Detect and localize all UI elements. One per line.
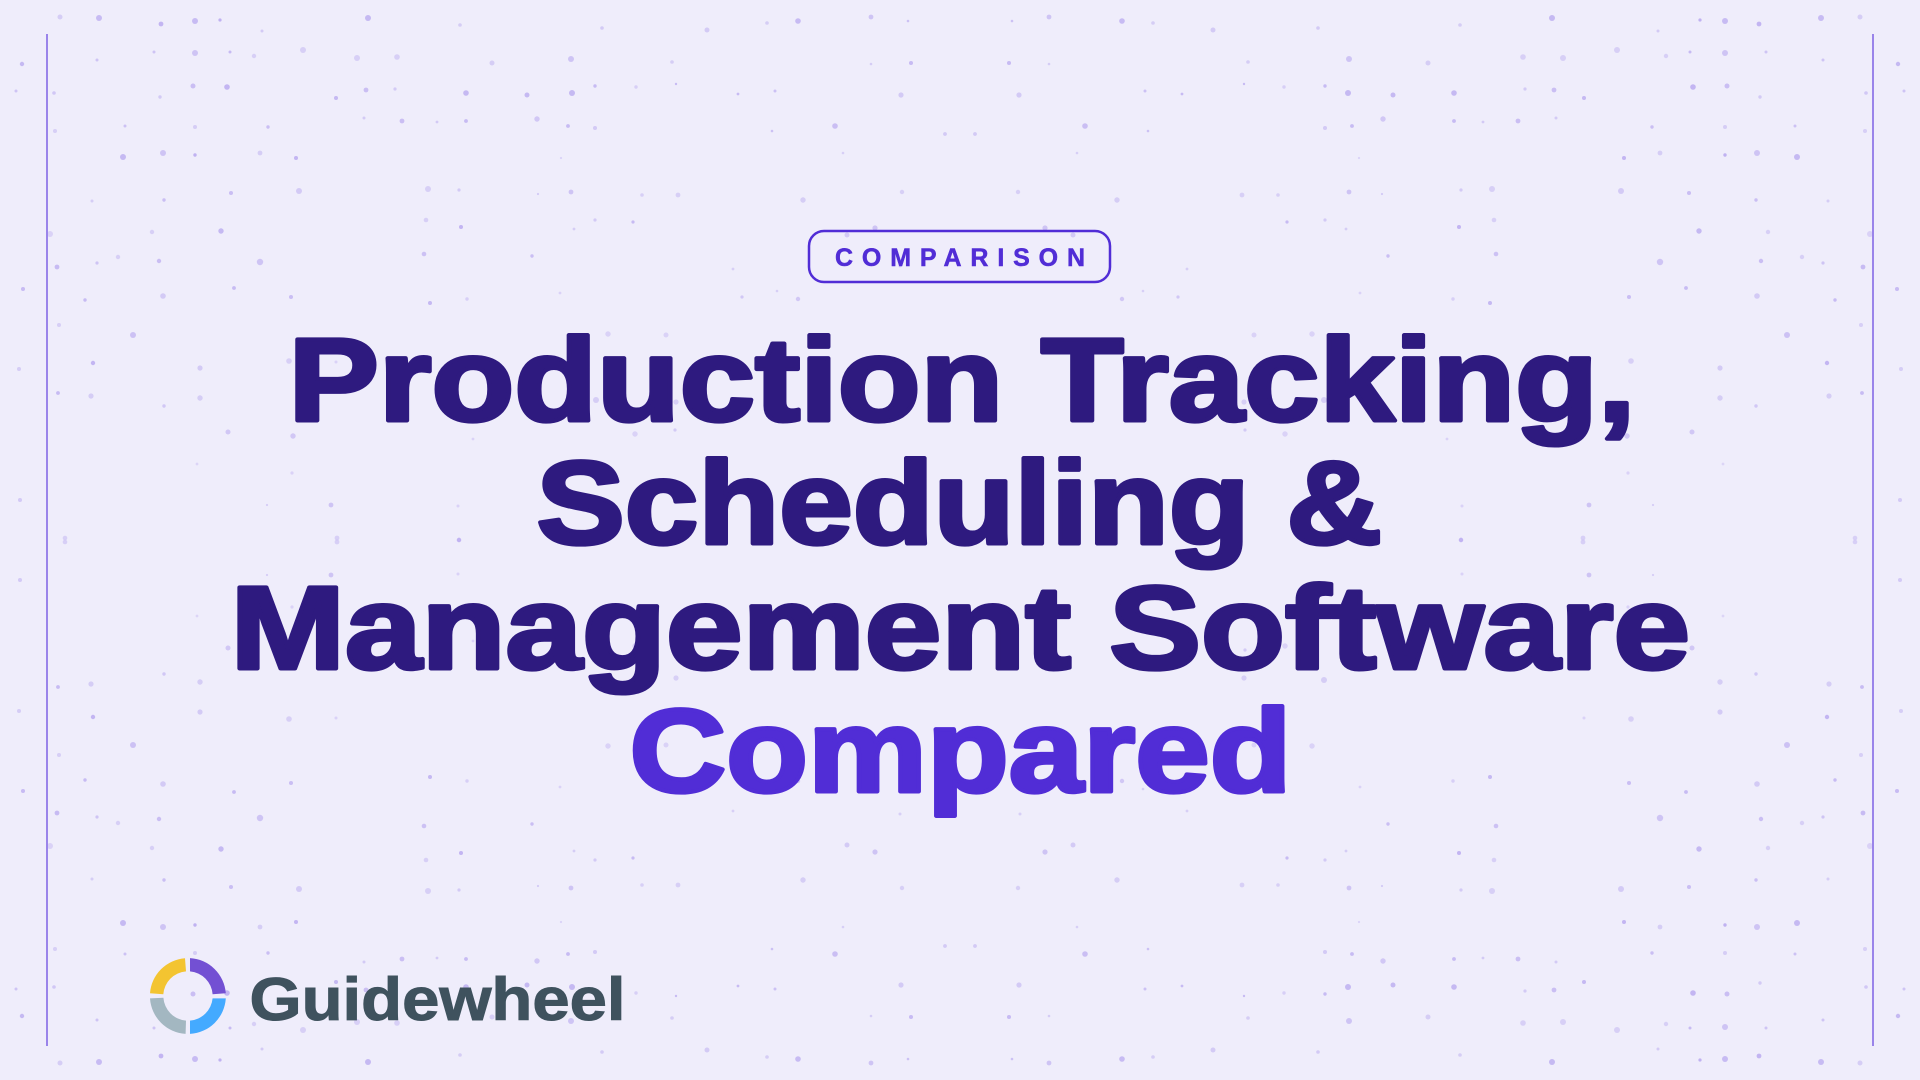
right vertical rule	[1872, 34, 1874, 1046]
left vertical rule	[46, 34, 48, 1046]
title: Management Software	[230, 562, 1690, 694]
wordmark: Guidewheel	[250, 966, 626, 1033]
badge: comparison	[809, 231, 1110, 282]
badge: comparison: COMPARISON	[835, 244, 1085, 272]
title: Scheduling &	[536, 438, 1382, 570]
title: Compared	[630, 686, 1292, 818]
title: Production Tracking,	[288, 314, 1636, 446]
icon: four-segment wheel	[150, 958, 226, 1034]
title	[230, 314, 1690, 818]
logo: Guidewheel	[150, 958, 626, 1034]
